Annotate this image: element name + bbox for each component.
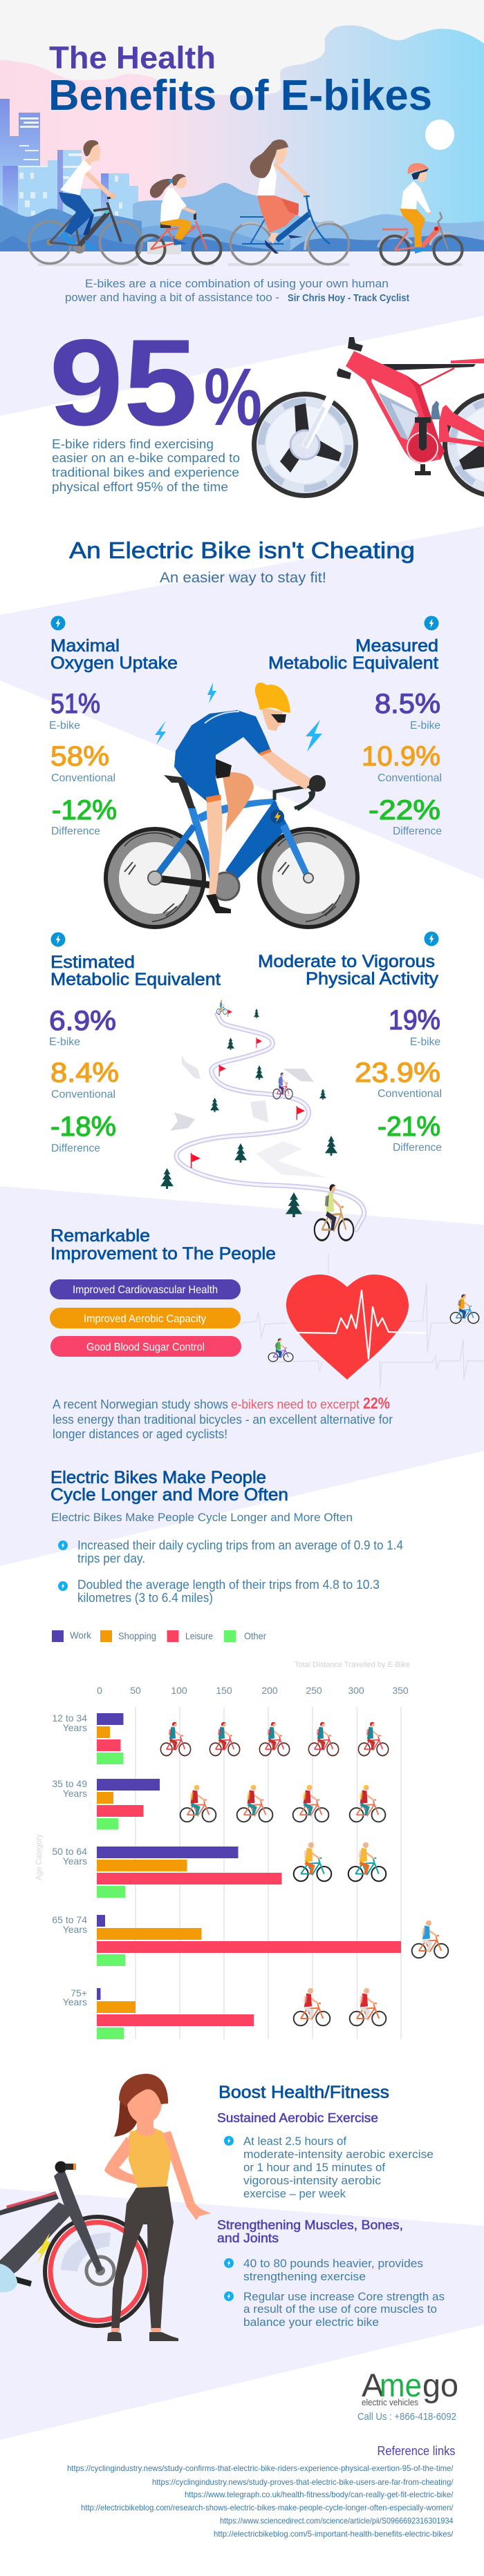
left arm — [104, 2137, 148, 2186]
reference list: https://cyclingindustry.news/study-confirms-that-electric-bike-riders-experience-physical-exertion-95-of-the-time/ — [67, 2463, 454, 2473]
pill: blood sugar control: Good Blood Sugar Control — [86, 1342, 205, 1353]
pictogram cyclist 65 to 74 — [412, 1920, 448, 1958]
terrain shapes — [170, 1055, 327, 1178]
text: 95% description: E-bike riders find exercising — [52, 437, 214, 451]
illustration: red electric bike — [254, 337, 484, 496]
bullet: trip length: kilometres (3 to 6.4 miles) — [77, 1591, 213, 1605]
bar chart: distance travelled by age category — [34, 1661, 448, 2039]
heading: Measured — [355, 636, 438, 656]
bullet: daily trips: Increased their daily cycling trips from an average of 0.9 to 1.4 — [77, 1538, 403, 1552]
seat bar and rack — [382, 359, 484, 385]
face — [127, 2082, 162, 2124]
heading: cycle longer — [50, 1468, 288, 1505]
illustration: road cyclist — [106, 683, 357, 927]
lightning bolts — [155, 683, 322, 752]
label difference: Difference — [393, 1142, 442, 1154]
x axis labels: 300 — [348, 1685, 364, 1696]
text: norwegian study — [53, 1394, 393, 1441]
label e-bike: E-bike — [49, 720, 80, 732]
reference list: https://cyclingindustry.news/study-proves-that-electric-bike-users-are-far-from-cheating/ — [152, 2477, 454, 2487]
flags — [191, 1009, 305, 1168]
heading — [258, 952, 439, 989]
panel: lavender band behind cyclist stats — [0, 526, 484, 879]
pill: aerobic capacity — [50, 1308, 241, 1328]
x axis labels: 250 — [306, 1685, 322, 1696]
reference list — [67, 2463, 454, 2539]
heading: cycle longer: Electric Bikes Make People — [50, 1468, 266, 1487]
leggings — [111, 2186, 174, 2333]
heading: reference links: Reference links — [378, 2444, 455, 2458]
text: norwegian study: A recent Norwegian study shows — [53, 1397, 228, 1411]
pictogram cyclists 75+ — [294, 1988, 386, 2025]
middle hills — [142, 224, 290, 251]
icon: bolt badge — [425, 931, 438, 946]
value difference: -12% — [52, 795, 117, 826]
heading: Moderate to Vigorous — [258, 952, 435, 971]
left shoe — [107, 2332, 122, 2341]
heading: remarkable improvement: Improvement to The People — [50, 1244, 276, 1263]
value difference: -21% — [378, 1112, 440, 1142]
x axis labels: 200 — [261, 1685, 278, 1696]
pill: blood sugar control — [50, 1336, 241, 1357]
neck and shoulders — [129, 2114, 166, 2148]
cyclist: girl — [137, 174, 221, 264]
front hills — [0, 234, 484, 251]
ankles — [111, 2328, 160, 2334]
text: 95% description: physical effort 95% of the time — [52, 480, 228, 494]
bullet: aerobic exercise: or 1 hour and 15 minutes of — [243, 2161, 385, 2174]
heading: Metabolic Equivalent — [50, 970, 221, 989]
bullet: aerobic exercise: At least 2.5 hours of — [243, 2135, 346, 2148]
gradient sky shape — [0, 26, 484, 251]
age group 65 to 74 — [52, 1914, 401, 1966]
chart legend — [52, 1630, 266, 1642]
panel: measured metabolic equivalent — [268, 616, 442, 837]
heading: cycle longer: Cycle Longer and More Often — [50, 1485, 288, 1505]
value difference: -18% — [50, 1112, 116, 1142]
trees — [160, 1009, 337, 1217]
text: norwegian study: less energy than traditional bicycles - an excellent alternative for — [53, 1413, 393, 1427]
quote text: Sir Chris Hoy - Track Cyclist — [288, 292, 409, 304]
bullet: heavier: strengthening exercise — [243, 2270, 366, 2283]
label difference: Difference — [51, 1143, 100, 1154]
age group 65 to 74: 65 to 74 — [52, 1914, 87, 1925]
reference list: http://electricbikeblog.com/5-important-health-benefits-electric-bikes/ — [214, 2529, 454, 2539]
x axis labels: 50 — [130, 1685, 141, 1696]
value e-bike: 6.9% — [49, 1006, 116, 1036]
pictogram cyclists 12 to 34 — [160, 1722, 389, 1755]
value e-bike: 51% — [50, 689, 100, 719]
subheading: strengthening: and Joints — [217, 2231, 279, 2245]
panel: lavender band behind boost health section — [0, 2188, 484, 2440]
label conventional: Conventional — [378, 772, 442, 784]
front leg — [207, 799, 222, 895]
subheading: sustained aerobic: Sustained Aerobic Exercise — [217, 2111, 378, 2125]
value e-bike: 19% — [389, 1005, 440, 1036]
subheading: strengthening: Strengthening Muscles, Bones, — [217, 2218, 403, 2232]
left hills — [0, 205, 142, 251]
text: norwegian study: longer distances or aged cyclists! — [53, 1427, 227, 1441]
cyclist: man — [29, 140, 142, 264]
road shadows — [38, 263, 462, 266]
bullet: core strength — [224, 2290, 445, 2329]
cyclist: woman — [231, 140, 348, 264]
pictogram cyclists 50 to 64 — [294, 1842, 386, 1881]
value difference: -22% — [369, 795, 440, 826]
bullet: trip length: Doubled the average length of their trips from 4.8 to 10.3 — [77, 1578, 380, 1592]
rear triangle — [439, 405, 484, 447]
bullet: aerobic exercise: exercise – per week — [243, 2187, 346, 2200]
label e-bike: E-bike — [410, 1036, 440, 1048]
right shoe — [149, 2332, 178, 2341]
illustration: winding trail map — [160, 1000, 364, 1240]
chart legend: Other — [244, 1630, 266, 1641]
age group 35 to 49: Years — [63, 1788, 87, 1799]
handlebar — [274, 786, 314, 810]
sunglasses — [271, 714, 286, 723]
label e-bike: E-bike — [49, 1036, 80, 1048]
helmet — [255, 683, 290, 713]
bullet: daily trips: trips per day. — [77, 1552, 145, 1565]
x axis labels: 150 — [216, 1685, 232, 1696]
bullet: aerobic exercise: vigorous-intensity aerobic — [243, 2174, 382, 2187]
bullet: core strength: Regular use increase Core strength as — [243, 2290, 445, 2303]
reference list: http://electricbikeblog.com/research-shows-electric-bikes-make-people-cycle-longer-often-especially-women/ — [81, 2503, 454, 2512]
subheading: cycle longer: Electric Bikes Make People Cycle Longer and More Often — [51, 1511, 353, 1524]
stat: 95%: % — [204, 352, 262, 443]
panel: lavender band behind improvement section — [0, 1186, 484, 1566]
value e-bike: 8.5% — [375, 689, 440, 719]
bullet: core strength: balance your electric bike — [243, 2316, 379, 2329]
chart legend: Shopping — [118, 1630, 156, 1641]
y axis title: Age Category — [34, 1834, 44, 1880]
value conventional: 58% — [50, 741, 109, 772]
value conventional: 10.9% — [362, 741, 440, 772]
heading: Estimated — [50, 953, 135, 972]
panel: estimated metabolic equivalent — [49, 933, 221, 1154]
logo: Amego: me — [380, 2367, 422, 2403]
age group 75+: 75+ — [71, 1987, 87, 1998]
chart title: Total Distance Travelled by E-Bike — [295, 1661, 410, 1669]
pill: aerobic capacity: Improved Aerobic Capacity — [84, 1313, 206, 1325]
quote text — [65, 277, 409, 304]
bullet: aerobic exercise: moderate-intensity aerobic exercise — [243, 2148, 434, 2161]
age group 12 to 34: 12 to 34 — [52, 1712, 87, 1724]
icon: bolt badge — [51, 933, 65, 946]
crank and pedal — [407, 417, 438, 475]
heading: An Electric Bike isn't Cheating: An Electric Bike isn't Cheating — [69, 537, 415, 563]
chart legend: Leisure — [185, 1630, 213, 1641]
pill: cardiovascular health: Improved Cardiovascular Health — [73, 1284, 218, 1296]
label difference: Difference — [393, 826, 442, 837]
logo: Amego: go — [422, 2367, 458, 2403]
subheading: easier way: An easier way to stay fit! — [160, 570, 326, 586]
back leg — [221, 769, 254, 832]
panel: moderate to vigorous activity — [258, 931, 442, 1154]
sun — [425, 120, 454, 150]
front wheel — [254, 394, 355, 496]
age group 65 to 74: Years — [63, 1924, 87, 1935]
rear wheel — [445, 394, 484, 496]
heading: Maximal — [50, 636, 120, 656]
heading — [50, 636, 178, 673]
text: 95% description — [52, 437, 240, 494]
heading: Metabolic Equivalent — [268, 653, 438, 673]
shoe — [206, 894, 231, 913]
text: 95% description: easier on an e-bike compared to — [52, 451, 240, 465]
age group 75+: Years — [63, 1996, 87, 2007]
x axis labels: 0 — [97, 1685, 102, 1696]
reference list: https://www.sciencedirect.com/science/article/pii/S0966692316301934 — [220, 2516, 454, 2526]
age group 75+ — [63, 1987, 254, 2039]
illustration: hero scene — [0, 26, 484, 266]
frame shadow — [406, 375, 445, 459]
panel: maximal oxygen uptake — [49, 616, 178, 837]
age group 50 to 64: Years — [63, 1855, 87, 1867]
subheading: strengthening — [217, 2218, 403, 2245]
frame — [148, 799, 313, 900]
small cyclist left of heart — [268, 1339, 293, 1362]
cycling shorts — [213, 758, 232, 779]
ponytail — [114, 2086, 137, 2137]
right arm — [162, 2131, 211, 2220]
bullet: aerobic exercise — [224, 2135, 434, 2200]
heading: Oxygen Uptake — [50, 653, 178, 673]
title line: The Health: The Health — [49, 40, 216, 75]
saddle and post — [164, 775, 195, 808]
icon: heart with heartbeat — [286, 1275, 426, 1380]
front wheel — [259, 829, 357, 927]
frame — [346, 351, 445, 464]
logo: Amego — [362, 2367, 458, 2407]
logo: Amego: A — [362, 2367, 384, 2403]
bullet: daily trips — [58, 1538, 403, 1565]
heading: Physical Activity — [306, 969, 439, 989]
icon: bolt badge — [425, 616, 438, 630]
age group 50 to 64: 50 to 64 — [52, 1846, 87, 1857]
bullet: heavier: 40 to 80 pounds heavier, provides — [243, 2257, 423, 2270]
illustration: woman with electric bike — [0, 2074, 211, 2341]
age group 35 to 49 — [52, 1778, 160, 1829]
stat: 95%: 95 — [49, 314, 198, 451]
motor housing — [431, 401, 440, 419]
label conventional: Conventional — [51, 772, 115, 784]
quote text: E-bikes are a nice combination of using your own human — [85, 277, 389, 290]
value conventional: 23.9% — [355, 1058, 440, 1088]
city buildings — [0, 99, 138, 231]
stat: 95% — [49, 314, 262, 451]
value conventional: 8.4% — [50, 1058, 119, 1088]
trail — [176, 1014, 364, 1230]
cyclist: boy — [378, 163, 462, 264]
bike wheel — [45, 2217, 150, 2326]
text: 95% description: traditional bikes and experience — [52, 466, 239, 479]
reference list: https://www.telegraph.co.uk/health-fitness/body/can-really-get-fit-electric-bike/ — [185, 2490, 454, 2499]
panel: hero background — [0, 0, 484, 251]
tank top — [129, 2129, 171, 2188]
x axis labels: 100 — [171, 1685, 187, 1696]
arm — [259, 751, 312, 790]
contact phone: Call Us : +866-418-6092 — [357, 2411, 456, 2423]
tiny cyclist — [216, 1000, 227, 1014]
heading — [268, 636, 438, 673]
age group 35 to 49: 35 to 49 — [52, 1778, 87, 1789]
icon: bolt badge — [51, 616, 65, 630]
jersey — [174, 710, 271, 801]
bullet: core strength: a result of the use of core muscles to — [243, 2302, 437, 2316]
title line: Benefits of E-bikes: Benefits of E-bikes — [48, 72, 432, 120]
medium cyclist — [273, 1073, 292, 1099]
label conventional: Conventional — [51, 1089, 115, 1100]
logo: Amego: electric vehicles — [362, 2397, 418, 2407]
age group 12 to 34 — [52, 1712, 123, 1764]
distant hills — [133, 183, 484, 251]
x axis labels: 350 — [392, 1685, 409, 1696]
title — [48, 40, 432, 120]
x axis labels — [97, 1685, 409, 1696]
quote text: power and having a bit of assistance too - — [65, 291, 279, 304]
age group 12 to 34: Years — [63, 1722, 87, 1733]
panel: lavender band under hero — [0, 251, 484, 416]
bullet: heavier — [224, 2257, 423, 2283]
chart legend: Work — [70, 1630, 92, 1641]
pill: cardiovascular health — [50, 1279, 241, 1299]
rear wheel — [106, 829, 204, 927]
face — [261, 707, 283, 731]
handlebar — [337, 337, 363, 379]
label e-bike: E-bike — [410, 720, 440, 732]
battery — [378, 392, 418, 440]
label difference: Difference — [51, 826, 100, 837]
small cyclist right of heart — [450, 1295, 479, 1324]
bullet: trip length — [58, 1578, 380, 1605]
label conventional: Conventional — [378, 1088, 442, 1100]
large cyclist — [315, 1184, 353, 1240]
pictogram cyclists 35 to 49 — [180, 1785, 385, 1822]
heading — [50, 953, 221, 989]
text: norwegian study: e-bikers need to excerpt — [231, 1397, 360, 1411]
age group 50 to 64 — [52, 1846, 282, 1898]
hair — [119, 2074, 168, 2107]
heading: remarkable improvement: Remarkable — [50, 1226, 150, 1246]
text: norwegian study: 22% — [363, 1394, 390, 1412]
heading: remarkable improvement — [50, 1226, 276, 1263]
heading: boost health: Boost Health/Fitness — [218, 2083, 389, 2102]
faint ECG lines — [241, 1254, 484, 1389]
bike frame — [0, 2161, 103, 2292]
glove — [309, 775, 326, 792]
